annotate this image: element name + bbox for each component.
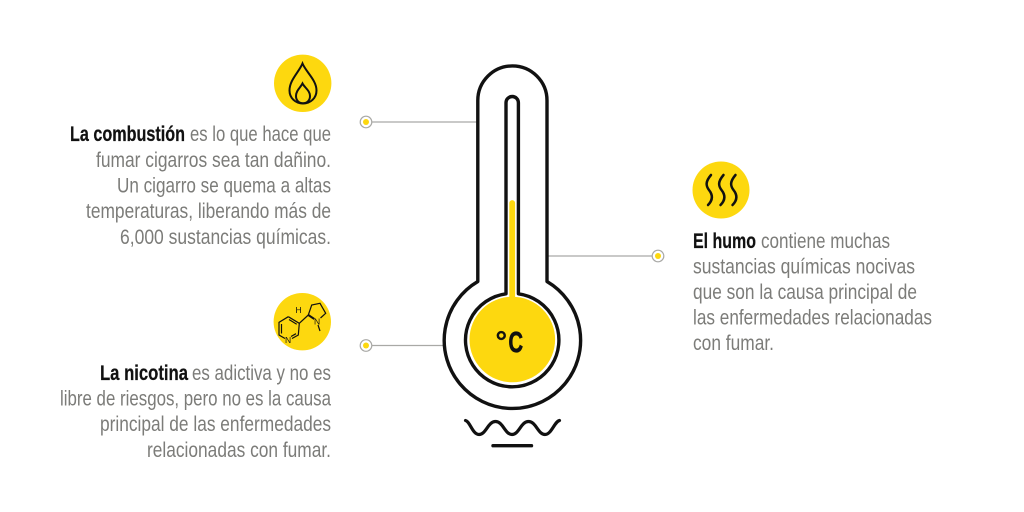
text block: combustion: Un cigarro se quema a altas [117, 174, 331, 198]
icon: heat base bar [493, 444, 532, 447]
text block: smoke: con fumar. [693, 331, 774, 355]
text block: smoke: contiene muchas [761, 229, 890, 253]
text block: combustion: La combustión [70, 122, 185, 146]
degree label: ° [496, 326, 507, 358]
thermometer outer outline [444, 66, 581, 408]
text block: nicotine: principal de las enfermedades [100, 412, 331, 436]
mercury column [509, 200, 515, 300]
mercury bulb [470, 297, 555, 382]
text block: nicotine: es adictiva y no es [192, 361, 331, 385]
icon: nicotine molecule: H [296, 305, 302, 315]
text block: nicotine [60, 361, 331, 462]
text block: smoke: que son la causa principal de [693, 280, 917, 304]
icon: flame [274, 55, 331, 112]
icon: heat wave [466, 420, 560, 434]
text block: nicotine: relacionadas con fumar. [147, 438, 331, 462]
degree label: C [508, 327, 523, 359]
text block: nicotine: La nicotina [100, 361, 189, 385]
text block: smoke: las enfermedades relacionadas [693, 306, 932, 330]
connector: nicotine to thermometer [360, 340, 444, 351]
thermometer [444, 66, 581, 408]
icon: nicotine molecule: N [285, 335, 291, 345]
icon: nicotine molecule [274, 293, 331, 350]
text block: smoke [693, 229, 932, 355]
connector: smoke to thermometer [548, 250, 664, 262]
text block: combustion: 6,000 sustancias químicas. [120, 225, 331, 249]
icon: nicotine molecule: N [314, 316, 320, 326]
degree label [496, 326, 523, 359]
text block: combustion: fumar cigarros sea tan dañino. [96, 148, 331, 172]
text block: combustion [70, 122, 331, 249]
text block: smoke: sustancias químicas nocivas [693, 254, 915, 278]
icon: smoke waves [692, 162, 750, 218]
text block: combustion: temperaturas, liberando más de [86, 199, 331, 223]
connector: combustion to thermometer [360, 116, 477, 128]
thermometer inner tube [466, 96, 559, 387]
text block: combustion: es lo que hace que [190, 122, 331, 146]
text block: smoke: El humo [693, 229, 756, 253]
text block: nicotine: libre de riesgos, pero no es la causa [60, 386, 331, 410]
